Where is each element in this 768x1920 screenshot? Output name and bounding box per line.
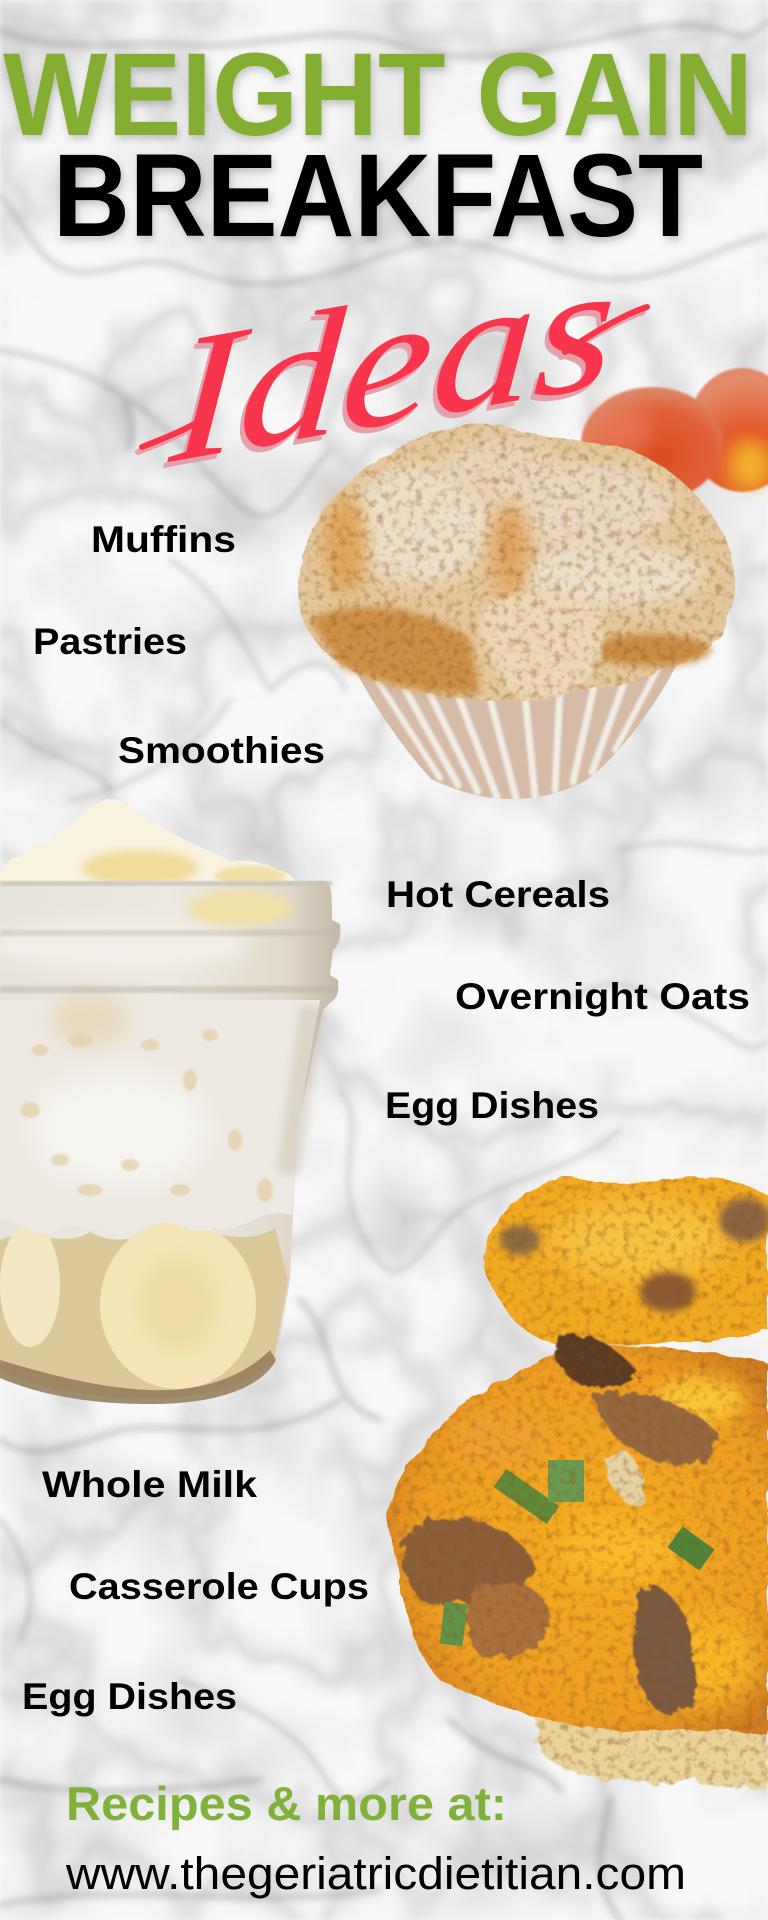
script heading: Ideas: Ideas xyxy=(160,228,618,509)
label: Hot Cereals: Hot Cereals xyxy=(386,874,610,915)
sausage crumbles xyxy=(403,1334,717,1713)
label: Egg Dishes: Egg Dishes xyxy=(385,1085,599,1126)
photo: egg casserole cups xyxy=(385,1176,768,1790)
jar rim and neck xyxy=(0,881,338,1176)
label: Muffins: Muffins xyxy=(91,519,236,560)
green onions xyxy=(451,1460,707,1645)
jar banana layer xyxy=(0,1221,288,1404)
script heading: Ideas: Ideas xyxy=(164,222,622,503)
jar topping: banana and coconut xyxy=(0,799,296,900)
jar oat layer xyxy=(0,1000,320,1234)
muffin paper cup xyxy=(350,656,681,799)
label: Casserole Cups: Casserole Cups xyxy=(69,1566,369,1607)
title: BREAKFAST: BREAKFAST xyxy=(53,130,703,262)
icon: peaches xyxy=(581,368,768,501)
back egg cup xyxy=(483,1176,768,1345)
label: Smoothies: Smoothies xyxy=(118,730,325,771)
label: Pastries: Pastries xyxy=(33,621,187,662)
label: Whole Milk: Whole Milk xyxy=(42,1464,257,1505)
footer: website url: www.thegeriatricdietitian.com xyxy=(65,1848,686,1899)
photo: muffin xyxy=(298,424,735,799)
label: Egg Dishes: Egg Dishes xyxy=(22,1676,237,1717)
muffin top xyxy=(298,424,735,701)
jar body xyxy=(0,881,340,1404)
photo: overnight oats jar xyxy=(0,799,340,1404)
label: Overnight Oats: Overnight Oats xyxy=(455,976,750,1017)
footer: Recipes & more at: Recipes & more at: xyxy=(66,1777,507,1830)
front egg cup xyxy=(385,1334,768,1790)
